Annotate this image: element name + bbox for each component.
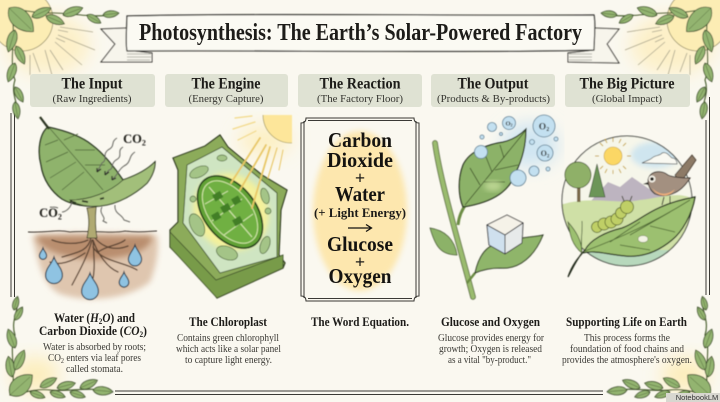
illustration: plant cell and chloroplast <box>168 114 296 300</box>
illustration: leaf, glucose cube and oxygen bubbles <box>430 115 558 297</box>
lower right leaf <box>475 235 543 273</box>
sun with glow <box>222 114 296 170</box>
column heading: The Input <box>30 74 155 107</box>
sun <box>595 138 631 174</box>
illustration: leaf, soil and water <box>28 117 158 300</box>
oxygen bubbles <box>474 115 558 186</box>
caption: The Input: CO <box>48 353 63 364</box>
watermark: NotebookLM <box>676 393 718 402</box>
caption: Supporting Life on Earth <box>562 315 692 366</box>
frame border <box>11 97 710 394</box>
equation text: + <box>355 252 365 272</box>
soil <box>28 231 158 299</box>
cell interior <box>183 147 277 273</box>
bubble labels <box>505 120 550 160</box>
stem <box>87 207 97 238</box>
blue glow <box>502 123 558 167</box>
column heading: The Engine: (Energy Capture) <box>188 94 264 105</box>
caption: Glucose and Oxygen: growth; Oxygen is released <box>439 344 543 355</box>
caption: The Chloroplast: which acts like a solar panel <box>176 344 281 355</box>
bubble labels: O <box>539 122 546 132</box>
big leaf <box>459 129 526 207</box>
title banner <box>101 15 619 63</box>
light rays <box>231 116 283 208</box>
bird <box>643 155 696 205</box>
cloud <box>642 153 677 164</box>
column heading: The Input: The Input <box>62 76 123 92</box>
caption: The Chloroplast: Contains green chlorophyll <box>177 333 279 344</box>
title: Photosynthesis: The Earth’s Solar-Powered Factory <box>139 20 582 46</box>
left leaf <box>430 228 457 255</box>
equation text: Glucose <box>327 232 393 256</box>
caption: The Input: ) <box>143 324 147 338</box>
column heading: The Engine <box>165 74 288 107</box>
equation text: + <box>355 168 365 188</box>
caption title: ) and <box>110 311 138 325</box>
carbon dioxide squiggles <box>50 138 135 223</box>
caption: The Input: 2 <box>140 330 143 339</box>
caption: Glucose and Oxygen: Glucose provides energy for <box>438 333 544 344</box>
caption: Glucose and Oxygen: as a vital "by-product." <box>448 355 531 366</box>
caption: Supporting Life on Earth: foundation of food chains and <box>570 344 685 355</box>
caption: The Input: called stomata. <box>66 364 123 375</box>
ornate frame <box>301 118 419 301</box>
sugar cube <box>487 215 523 254</box>
caption body: Water is absorbed by roots; <box>43 342 146 353</box>
column heading: The Big Picture <box>565 74 690 107</box>
equation text: Water <box>335 182 385 206</box>
bubble labels: O <box>505 120 511 128</box>
panel: word equation <box>301 118 419 301</box>
equation text: Carbon <box>328 128 392 152</box>
caption: The Input <box>39 311 147 375</box>
caption: The Chloroplast <box>176 315 281 366</box>
organelles <box>186 155 272 263</box>
caption title: Water (H <box>54 311 100 325</box>
column heading: The Big Picture: The Big Picture <box>580 76 675 92</box>
caption title: 2 <box>99 317 102 326</box>
bubble labels: 2 <box>546 127 549 133</box>
bubble labels: 2 <box>547 154 550 160</box>
column heading: The Reaction: (The Factory Floor) <box>317 94 404 105</box>
illustration: ecosystem circle <box>560 135 696 277</box>
column heading: The Output: The Output <box>458 76 529 92</box>
big leaf <box>568 197 695 277</box>
caption: The Input: 2 <box>61 357 64 365</box>
trees <box>565 162 605 202</box>
equation text: Oxygen <box>328 264 392 288</box>
plant stem <box>435 143 473 297</box>
caption: The Chloroplast: The Chloroplast <box>189 315 268 329</box>
banner ribbon tails <box>101 15 619 63</box>
leaf <box>39 117 155 206</box>
column heading: The Reaction: The Reaction <box>320 76 401 92</box>
equation text <box>314 128 406 288</box>
label: CO2 lower: CO <box>39 206 58 220</box>
bubble labels: 2 <box>511 122 513 128</box>
caption: The Input: enters via leaf pores <box>64 353 141 364</box>
caption title: O <box>102 311 110 325</box>
equation text: (+ Light Energy) <box>314 205 406 220</box>
bubble labels: O <box>541 149 547 158</box>
yellow wash <box>313 131 407 291</box>
corner decoration: bottom left vines <box>4 296 113 401</box>
caption: The Chloroplast: to capture light energy. <box>185 355 272 366</box>
label: CO2 upper: CO <box>123 132 142 146</box>
caption: Glucose and Oxygen: Glucose and Oxygen <box>441 315 540 329</box>
column heading: The Output <box>431 74 555 107</box>
corner decoration: top right sun and vines <box>601 0 720 119</box>
caption: The Word Equation: The Word Equation. <box>311 315 409 329</box>
caption: The Input: Carbon Dioxide (CO <box>39 324 141 338</box>
caption: Supporting Life on Earth: This process forms the <box>584 333 670 344</box>
corner decoration: top left sun and vines <box>0 0 119 119</box>
label: CO2 upper: 2 <box>142 138 146 148</box>
column heading: The Big Picture: (Global Impact) <box>592 94 663 105</box>
chloroplast <box>184 164 276 260</box>
caption: Supporting Life on Earth: provides the atmosphere's oxygen. <box>562 355 692 366</box>
column heading: The Output: (Products & By-products) <box>437 94 551 105</box>
roots <box>50 237 137 285</box>
column heading: The Engine: The Engine <box>192 76 261 92</box>
corner decoration: bottom right vines <box>607 296 716 401</box>
water drops <box>39 245 142 300</box>
column heading: The Reaction <box>298 74 422 107</box>
equation text: Dioxide <box>327 148 393 172</box>
column heading: The Input: (Raw Ingredients) <box>52 94 132 105</box>
cell wall <box>170 135 287 298</box>
label: CO2 lower: 2 <box>58 212 62 222</box>
arrow <box>348 224 372 232</box>
caption: Supporting Life on Earth: Supporting Life on Earth <box>566 315 687 329</box>
sprout <box>568 221 582 253</box>
caption: Glucose and Oxygen <box>438 315 544 366</box>
caterpillar <box>592 196 634 232</box>
